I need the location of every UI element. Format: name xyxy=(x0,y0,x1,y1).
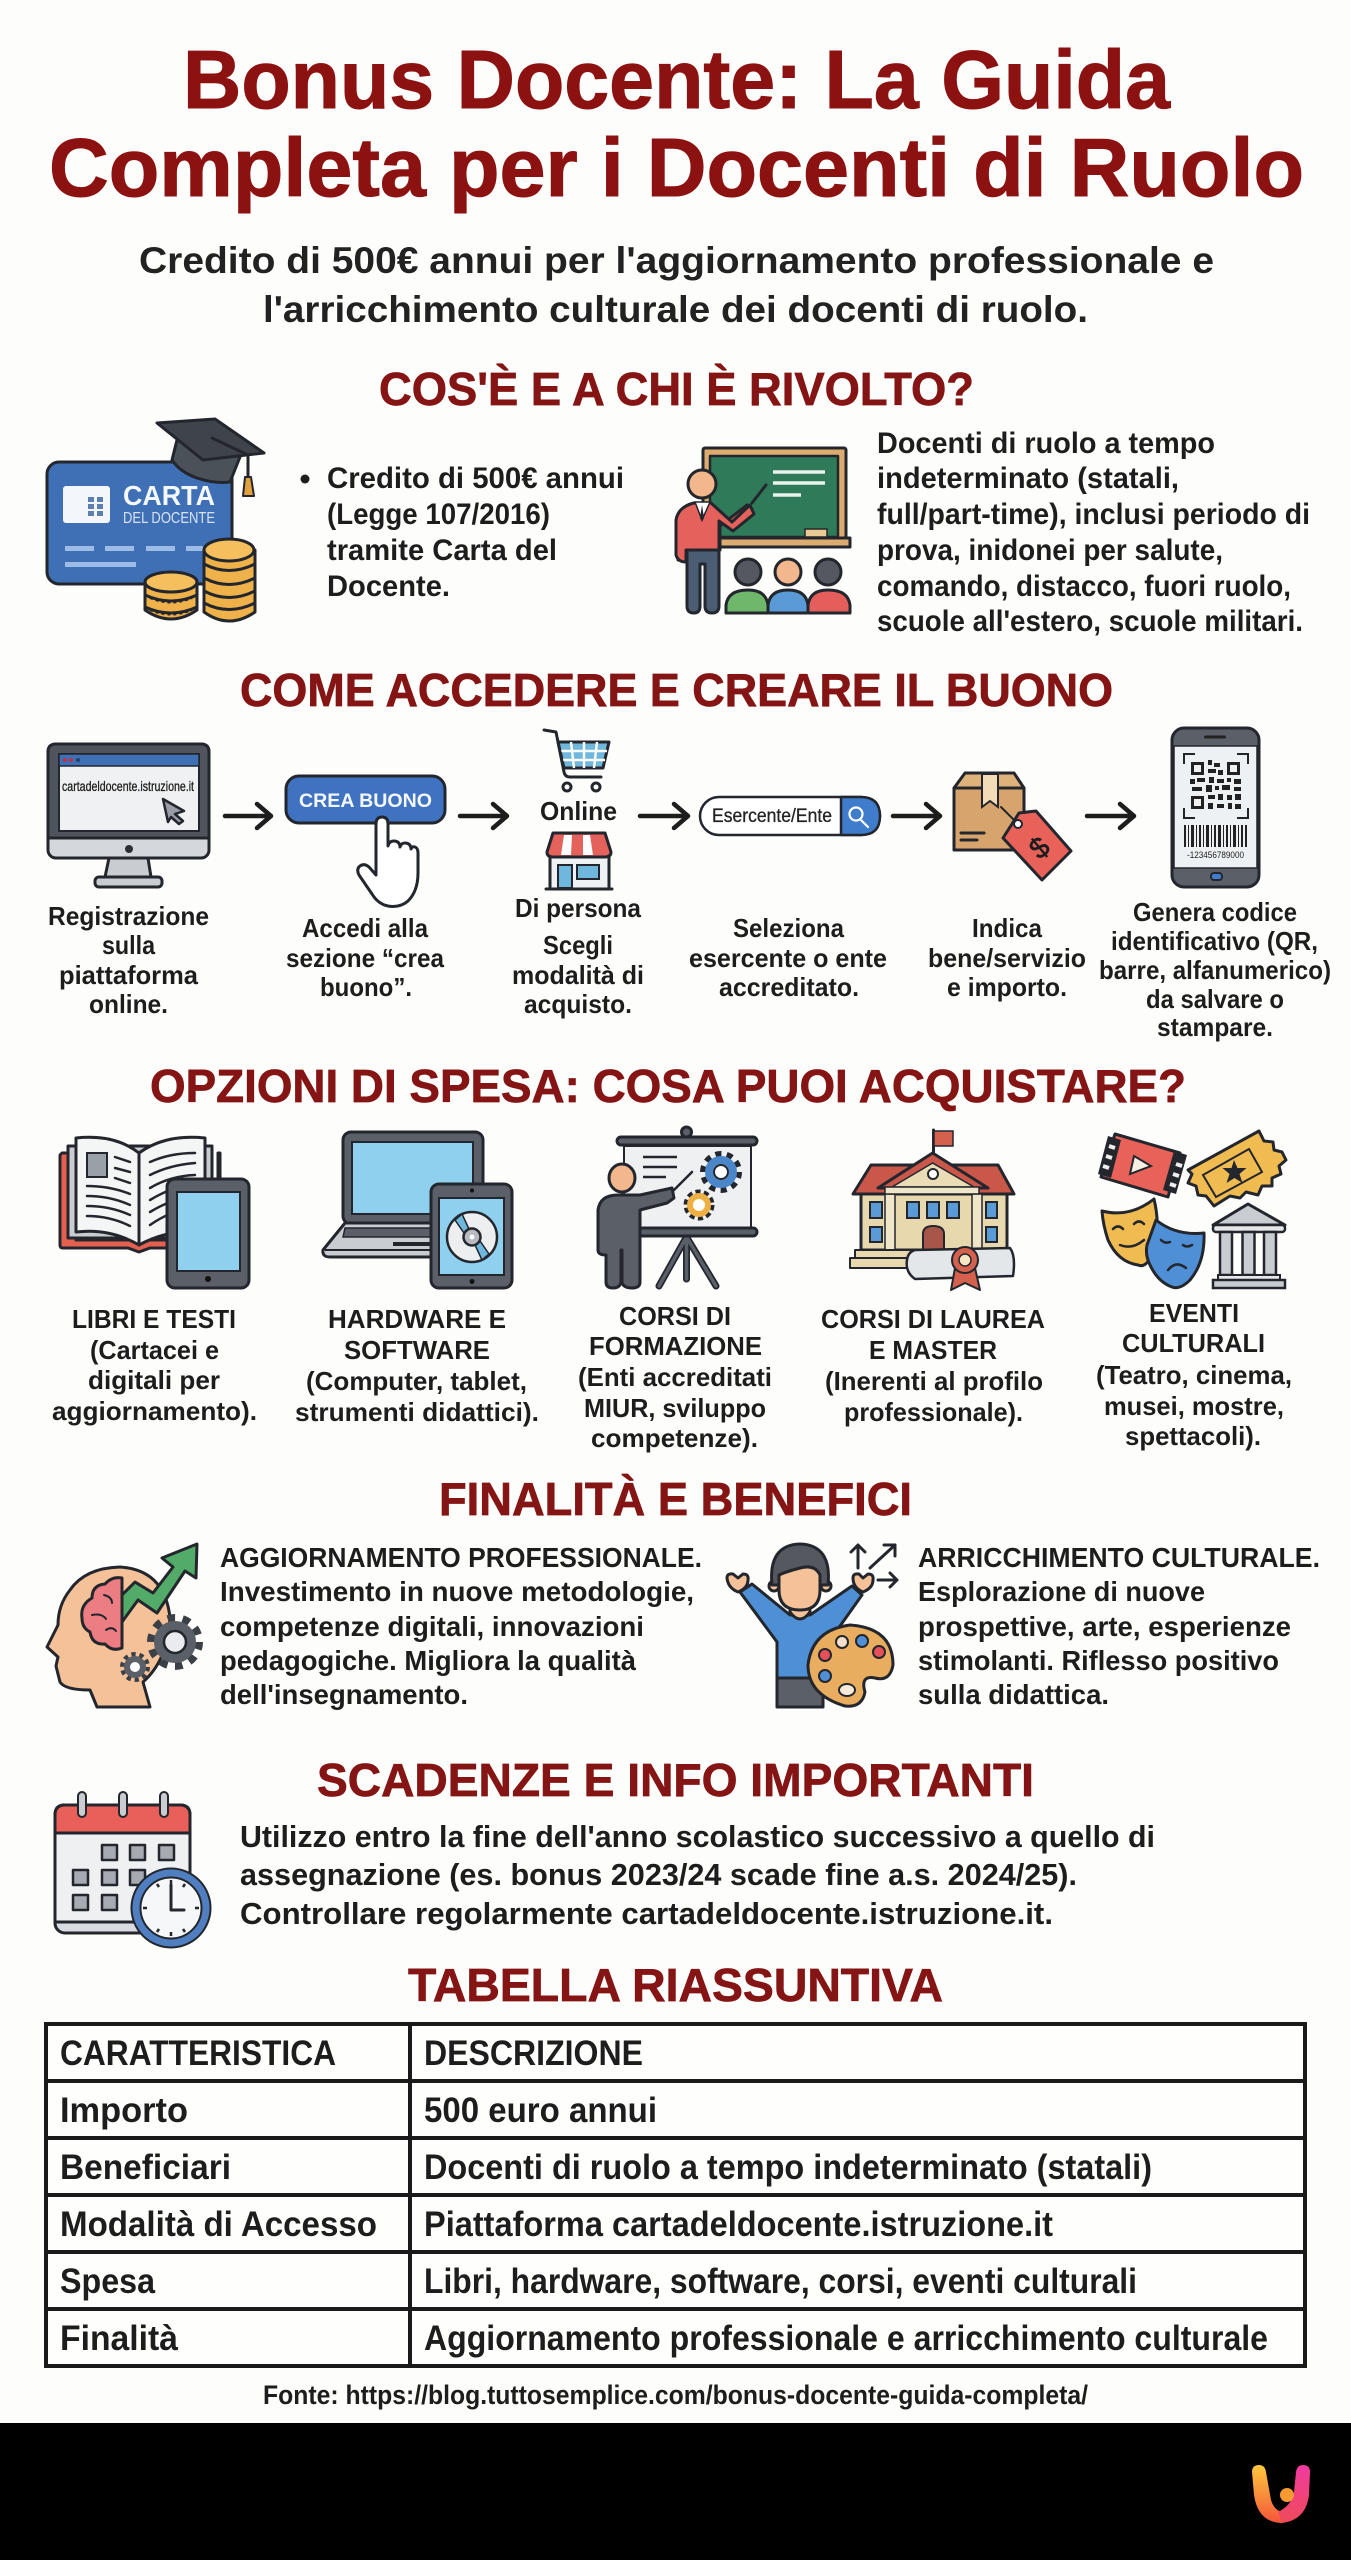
spending option captions: LIBRI E TESTI xyxy=(72,1304,236,1334)
spending option captions: SOFTWARE xyxy=(344,1335,490,1365)
icon: phone with codes xyxy=(1172,728,1259,887)
heading: cos'è: COS'È E A CHI È RIVOLTO? xyxy=(379,363,974,415)
spending option captions: CULTURALI xyxy=(1122,1328,1265,1358)
spending option captions: digitali per xyxy=(88,1365,220,1395)
bullet text xyxy=(300,462,624,603)
summary table: Libri, hardware, software, corsi, eventi culturali xyxy=(424,2262,1137,2301)
subtitle: Credito di 500€ annui per l'aggiornamento professionale e xyxy=(139,240,1214,281)
step captions: sezione “crea xyxy=(286,943,445,973)
summary table: Spesa xyxy=(60,2262,155,2301)
step captions: buono”. xyxy=(320,972,412,1002)
heading: come accedere: COME ACCEDERE E CREARE IL BUONO xyxy=(240,664,1113,716)
spending option captions: EVENTI xyxy=(1149,1298,1239,1328)
summary table: Piattaforma cartadeldocente.istruzione.it xyxy=(424,2205,1053,2244)
benefit text: aggiornamento xyxy=(220,1542,702,1710)
step captions: online. xyxy=(89,989,168,1019)
step captions: Accedi alla xyxy=(302,913,428,943)
panel: finalità e benefici xyxy=(47,1473,1320,1710)
heading: scadenze: SCADENZE E INFO IMPORTANTI xyxy=(317,1754,1034,1806)
summary table: Importo xyxy=(60,2091,188,2130)
eligibility text: full/part-time), inclusi periodo di xyxy=(877,498,1310,531)
step captions: esercente o ente xyxy=(689,943,887,973)
spending option captions: CORSI DI LAUREA xyxy=(821,1304,1045,1334)
panel: scadenze e info importanti xyxy=(55,1754,1155,1943)
deadline text xyxy=(240,1819,1155,1931)
icon: teacher at blackboard xyxy=(676,448,850,613)
icon: calendar and clock xyxy=(55,1792,206,1943)
panel: opzioni di spesa xyxy=(52,1060,1292,1453)
icon: carta del docente: DEL DOCENTE xyxy=(123,510,215,527)
icon: box and price tag: $ xyxy=(1023,831,1056,866)
spending option captions: CORSI DI xyxy=(619,1301,731,1331)
arrow 5 xyxy=(1087,804,1134,828)
eligibility text: comando, distacco, fuori ruolo, xyxy=(877,570,1291,603)
heading: finalità: FINALITÀ E BENEFICI xyxy=(439,1473,912,1525)
benefit text: arricchimento: stimolanti. Riflesso positivo xyxy=(918,1645,1279,1676)
icon: university with diploma xyxy=(850,1130,1014,1290)
icon: box and price tag xyxy=(954,773,1071,880)
benefit text: aggiornamento: competenze digitali, innovazioni xyxy=(220,1611,644,1642)
spending option captions: MIUR, sviluppo xyxy=(584,1393,766,1423)
benefit text: aggiornamento: Investimento in nuove metodologie, xyxy=(220,1576,694,1607)
step captions: Indica xyxy=(972,913,1042,943)
step captions: acquisto. xyxy=(524,989,632,1019)
icon: cart xyxy=(544,730,609,791)
eligibility text: prova, inidonei per salute, xyxy=(877,534,1223,567)
spending option captions: HARDWARE E xyxy=(328,1304,506,1334)
spending option captions: musei, mostre, xyxy=(1104,1391,1284,1421)
eligibility text: scuole all'estero, scuole militari. xyxy=(877,605,1303,638)
summary table xyxy=(46,2024,1305,2366)
spending option captions: (Computer, tablet, xyxy=(306,1366,527,1396)
source line: Fonte: https://blog.tuttosemplice.com/bonus-docente-guida-completa/ xyxy=(263,2380,1088,2410)
icon: head with brain and growth arrow xyxy=(47,1544,199,1707)
benefit text: arricchimento: prospettive, arte, esperienze xyxy=(918,1611,1291,1642)
spending option captions xyxy=(52,1298,1292,1453)
eligibility text: indeterminato (statali, xyxy=(877,462,1179,495)
benefit text: arricchimento: Esplorazione di nuove xyxy=(918,1576,1205,1607)
step captions: bene/servizio xyxy=(928,943,1086,973)
heading: opzioni: OPZIONI DI SPESA: COSA PUOI ACQUISTARE? xyxy=(150,1060,1186,1112)
summary table: Finalità xyxy=(60,2319,179,2358)
benefit text: arricchimento: ARRICCHIMENTO CULTURALE. xyxy=(918,1542,1320,1573)
spending option captions: (Cartacei e xyxy=(90,1335,219,1365)
benefit text: arricchimento: sulla didattica. xyxy=(918,1679,1109,1710)
step captions: e importo. xyxy=(947,972,1067,1002)
arrow 2 xyxy=(460,804,507,828)
benefit text: aggiornamento: dell'insegnamento. xyxy=(220,1679,468,1710)
step captions: stampare. xyxy=(1157,1012,1273,1042)
title: Completa per i Docenti di Ruolo xyxy=(49,121,1304,214)
summary table: Beneficiari xyxy=(60,2148,231,2187)
eligibility text: Docenti di ruolo a tempo xyxy=(877,427,1215,460)
summary table: Modalità di Accesso xyxy=(60,2205,377,2244)
summary table: DESCRIZIONE xyxy=(424,2034,643,2073)
benefit text: arricchimento xyxy=(918,1542,1320,1710)
panel: come accedere e creare il buono xyxy=(48,664,1331,1042)
icon: crea buono button xyxy=(286,776,445,906)
title xyxy=(49,33,1304,214)
step captions xyxy=(48,897,1331,1042)
summary table: 500 euro annui xyxy=(424,2091,657,2130)
bullet text: Credito di 500€ annui xyxy=(327,462,624,495)
summary table: Docenti di ruolo a tempo indeterminato (statali) xyxy=(424,2148,1152,2187)
bullet text: tramite Carta del xyxy=(327,534,557,567)
icon: crea buono button: CREA BUONO xyxy=(299,791,432,812)
step captions: accreditato. xyxy=(719,972,859,1002)
heading: tabella: TABELLA RIASSUNTIVA xyxy=(408,1959,943,2011)
arrow 1 xyxy=(225,804,271,828)
subtitle: l'arricchimento culturale dei docenti di ruolo. xyxy=(263,289,1088,330)
step captions: modalità di xyxy=(512,960,644,990)
icon: laptop and tablet with disc xyxy=(323,1132,512,1288)
icon: monitor: cartadeldocente.istruzione.it xyxy=(62,778,194,794)
arrow 4 xyxy=(893,804,940,828)
summary table: Aggiornamento professionale e arricchimento culturale xyxy=(424,2319,1268,2358)
spending option captions: competenze). xyxy=(591,1423,758,1453)
label: online: Online xyxy=(540,796,617,826)
spending option captions: (Teatro, cinema, xyxy=(1096,1360,1292,1390)
step captions: da salvare o xyxy=(1146,984,1284,1014)
step captions: Scegli xyxy=(543,930,613,960)
icon: presenter at board xyxy=(598,1127,757,1288)
step captions: sulla xyxy=(102,930,155,960)
step captions: Registrazione xyxy=(48,901,209,931)
spending option captions: spettacoli). xyxy=(1125,1421,1261,1451)
spending option captions: (Enti accreditati xyxy=(578,1362,772,1392)
icon: carta del docente xyxy=(47,419,264,621)
title: Bonus Docente: La Guida xyxy=(183,33,1171,126)
arrow 3 xyxy=(640,804,688,828)
deadline text: Controllare regolarmente cartadeldocente.istruzione.it. xyxy=(240,1896,1053,1931)
panel: cos'è e a chi è rivolto xyxy=(47,363,1310,638)
bullet text: (Legge 107/2016) xyxy=(327,498,550,531)
logo xyxy=(1252,2465,1310,2523)
label: di persona: Di persona xyxy=(515,893,641,923)
icon: shop xyxy=(546,833,612,889)
icon: phone with codes: -123456789000 xyxy=(1187,850,1244,860)
step captions: barre, alfanumerico) xyxy=(1099,955,1331,985)
subtitle xyxy=(139,240,1214,330)
benefit text: aggiornamento: pedagogiche. Migliora la qualità xyxy=(220,1645,636,1676)
panel: tabella riassuntiva xyxy=(46,1959,1305,2410)
step captions: piattaforma xyxy=(59,960,199,990)
icon: monitor xyxy=(48,744,209,887)
step captions: Genera codice xyxy=(1133,897,1297,927)
deadline text: assegnazione (es. bonus 2023/24 scade fine a.s. 2024/25). xyxy=(240,1857,1077,1892)
spending option captions: (Inerenti al profilo xyxy=(825,1366,1043,1396)
icon: search bar xyxy=(700,797,880,835)
eligibility text xyxy=(877,427,1310,638)
spending option captions: professionale). xyxy=(844,1397,1023,1427)
deadline text: Utilizzo entro la fine dell'anno scolastico successivo a quello di xyxy=(240,1819,1155,1854)
icon: person with palette xyxy=(727,1544,897,1707)
benefit text: aggiornamento: AGGIORNAMENTO PROFESSIONALE. xyxy=(220,1542,702,1573)
summary table: CARATTERISTICA xyxy=(60,2034,336,2073)
icon: carta del docente: CARTA xyxy=(123,480,215,511)
spending option captions: strumenti didattici). xyxy=(295,1397,539,1427)
spending option captions: aggiornamento). xyxy=(52,1396,257,1426)
icon: culture events xyxy=(1098,1131,1286,1288)
spending option captions: E MASTER xyxy=(869,1335,997,1365)
spending option captions: FORMAZIONE xyxy=(589,1331,762,1361)
bullet text: Docente. xyxy=(327,570,450,603)
step captions: identificativo (QR, xyxy=(1111,926,1318,956)
step captions: Seleziona xyxy=(733,913,844,943)
icon: search bar: Esercente/Ente xyxy=(712,806,832,827)
icon: book and tablet xyxy=(60,1137,249,1288)
